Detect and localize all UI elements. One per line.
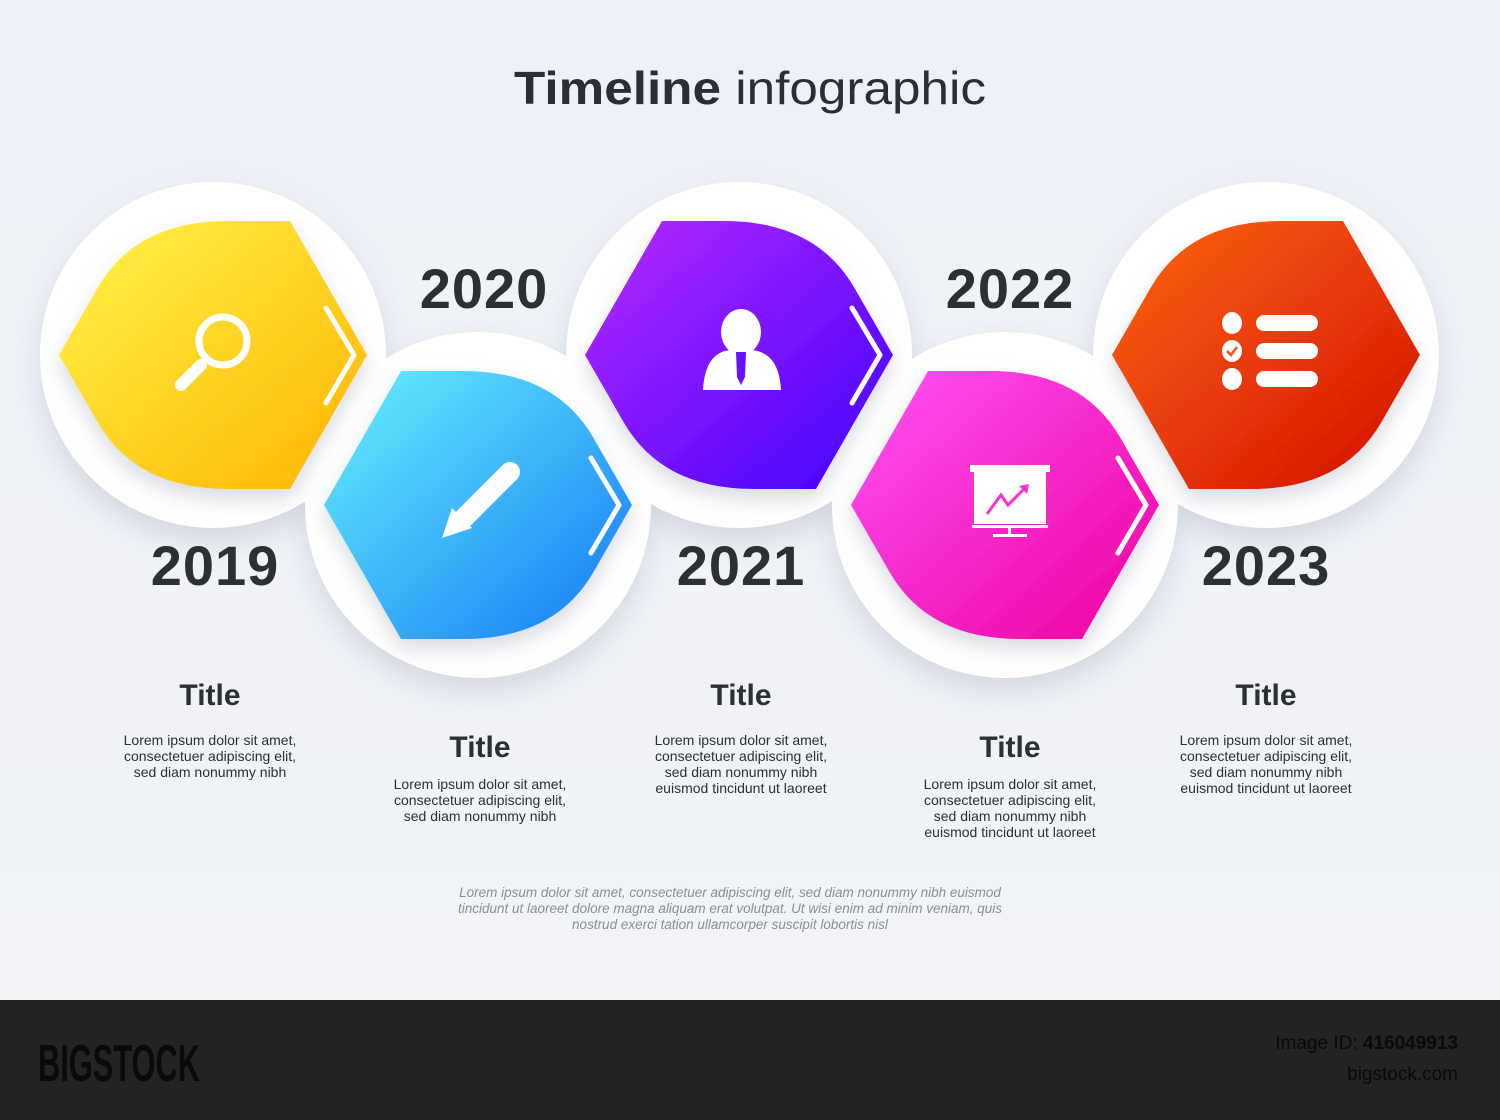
footer bar [0, 1000, 1500, 1120]
text block 2023 [1180, 679, 1352, 796]
text block 2021: euismod tincidunt ut laoreet [655, 780, 827, 796]
text block 2019: Lorem ipsum dolor sit amet, [124, 732, 296, 748]
text block 2022: Title [979, 731, 1041, 764]
text block 2020 [394, 731, 566, 824]
footer bar: Image ID: 416049913 [1275, 1033, 1458, 1054]
title: Timeline infographic [514, 62, 986, 114]
text block 2021: consectetuer adipiscing elit, [655, 748, 827, 764]
text block 2022: Lorem ipsum dolor sit amet, [924, 776, 1096, 792]
text block 2021: Lorem ipsum dolor sit amet, [655, 732, 827, 748]
icon: presentation board [970, 465, 1050, 537]
step 2022: pink hexagon [851, 371, 1159, 639]
text block 2023: consectetuer adipiscing elit, [1180, 748, 1352, 764]
icon: magnifier [181, 317, 247, 385]
text block 2020: sed diam nonummy nibh [404, 808, 556, 824]
white backdrop blobs [40, 182, 1439, 678]
text block 2022: sed diam nonummy nibh [934, 808, 1086, 824]
footnote paragraph: Lorem ipsum dolor sit amet, consectetuer adipiscing elit, sed diam nonummy nibh euismod [459, 885, 1001, 900]
text block 2020: consectetuer adipiscing elit, [394, 792, 566, 808]
text block 2019 [124, 679, 296, 780]
year labels: 2020 [420, 257, 548, 320]
year labels: 2021 [677, 534, 805, 597]
icon: checklist [1222, 312, 1318, 390]
step 2019: yellow hexagon [59, 221, 367, 489]
text block 2019: consectetuer adipiscing elit, [124, 748, 296, 764]
text block 2023: Lorem ipsum dolor sit amet, [1180, 732, 1352, 748]
text block 2023: sed diam nonummy nibh [1190, 764, 1342, 780]
step 2020: blue hexagon [324, 371, 632, 639]
year labels [151, 257, 1330, 597]
text block 2021: sed diam nonummy nibh [665, 764, 817, 780]
text block 2022 [924, 731, 1096, 840]
year labels: 2022 [946, 257, 1074, 320]
text block 2023: euismod tincidunt ut laoreet [1180, 780, 1352, 796]
footnote paragraph: tincidunt ut laoreet dolore magna aliquam erat volutpat. Ut wisi enim ad minim veniam, quis [458, 901, 1002, 916]
footer bar: bigstock.com [1347, 1064, 1458, 1085]
step 2023: orange hexagon [1112, 221, 1420, 489]
footnote paragraph: nostrud exerci tation ullamcorper suscipit lobortis nisl [572, 917, 889, 932]
icon: pencil [442, 472, 510, 538]
text block 2020: Lorem ipsum dolor sit amet, [394, 776, 566, 792]
footer bar: BIGSTOCK [38, 1035, 200, 1093]
year labels: 2023 [1202, 534, 1330, 597]
text block 2019: sed diam nonummy nibh [134, 764, 286, 780]
text block 2020: Title [449, 731, 511, 764]
text block 2021 [655, 679, 827, 796]
text block 2019: Title [179, 679, 241, 712]
year labels: 2019 [151, 534, 279, 597]
icon: person [703, 309, 781, 390]
text block 2023: Title [1235, 679, 1297, 712]
step 2021: purple hexagon [585, 221, 893, 489]
footnote paragraph [458, 885, 1002, 932]
text block 2021: Title [710, 679, 772, 712]
text block 2022: consectetuer adipiscing elit, [924, 792, 1096, 808]
text block 2022: euismod tincidunt ut laoreet [924, 824, 1096, 840]
